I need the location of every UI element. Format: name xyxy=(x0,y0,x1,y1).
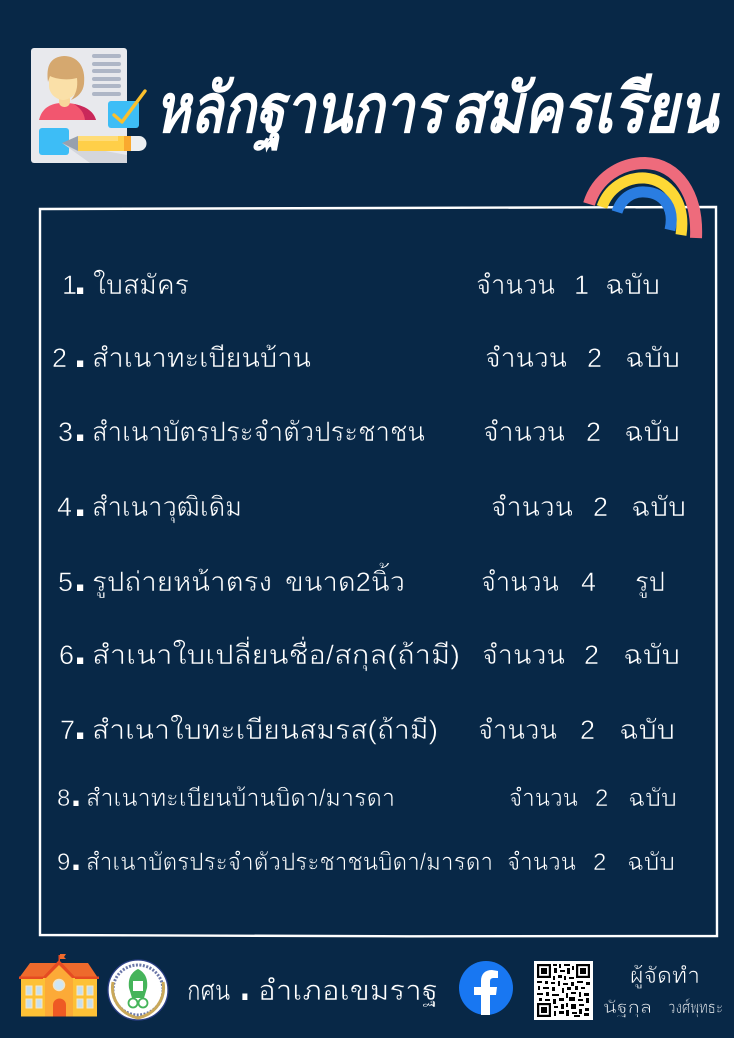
item 3: . xyxy=(74,402,86,451)
item 7: . xyxy=(74,700,86,749)
item 2: . xyxy=(74,328,86,377)
item 6: สำเนาใบเปลี่ยนชื่อ/สกุล(ถ้ามี) xyxy=(92,636,460,672)
icon: rainbow xyxy=(589,163,696,238)
item 8: 2 xyxy=(595,785,608,812)
item 5: 4 xyxy=(581,567,596,597)
organisation name: . xyxy=(240,961,250,1010)
credit name: นัฐกุล xyxy=(603,998,652,1018)
item 6: จำนวน xyxy=(482,640,565,670)
icon: institution seal xyxy=(108,960,168,1020)
item 8 xyxy=(57,773,677,814)
item 5: . xyxy=(74,552,86,601)
item 9: ฉบับ xyxy=(627,849,675,876)
item 6: . xyxy=(74,625,86,674)
credit xyxy=(603,963,723,1018)
icon: facebook xyxy=(459,961,513,1015)
item 1: . xyxy=(74,255,86,304)
item 2: จำนวน xyxy=(485,343,567,373)
item 2: สำเนาทะเบียนบ้าน xyxy=(92,343,311,373)
item 3 xyxy=(58,402,680,451)
item 9: . xyxy=(71,837,81,878)
title xyxy=(155,71,720,153)
item 9: 2 xyxy=(593,849,606,876)
item 7: สำเนาใบทะเบียนสมรส(ถ้ามี) xyxy=(92,714,438,745)
item 5: รูป xyxy=(635,567,665,598)
item 3: 2 xyxy=(586,417,601,447)
organisation name: อำเภอเขมราฐ xyxy=(258,975,438,1007)
item 4: 4 xyxy=(57,492,72,522)
item 6 xyxy=(59,625,680,674)
item 3: จำนวน xyxy=(483,417,565,447)
item 6: 6 xyxy=(59,640,74,670)
organisation name: กศน xyxy=(187,975,241,1006)
icon: application form with pencil xyxy=(31,48,147,163)
item 1: 1 xyxy=(574,270,589,300)
item 1: ใบสมัคร xyxy=(93,269,189,300)
item 3: 3 xyxy=(58,417,73,447)
item 2: ฉบับ xyxy=(625,343,680,373)
title: หลักฐานการ xyxy=(155,71,450,153)
item 8: ฉบับ xyxy=(628,785,677,812)
credit heading: ผู้จัดทำ xyxy=(630,963,700,989)
item 2: 2 xyxy=(587,343,602,373)
item 7 xyxy=(60,700,675,749)
item 5: ขนาด2นิ้ว xyxy=(285,562,405,597)
item 2: 2 xyxy=(52,343,67,373)
item 9 xyxy=(57,837,675,878)
item 5: รูปถ่ายหน้าตรง xyxy=(92,567,272,598)
item 5: 5 xyxy=(58,567,73,597)
item 7: 7 xyxy=(60,715,75,745)
item 4: จำนวน xyxy=(491,492,573,522)
item 4: 2 xyxy=(593,492,608,522)
item 9: สำเนาบัตรประจำตัวประชาชนบิดา/มารดา xyxy=(86,849,493,876)
item 8: จำนวน xyxy=(509,785,578,812)
icon: school building xyxy=(19,954,99,1016)
item 8: 8 xyxy=(57,785,70,812)
item 6: ฉบับ xyxy=(623,640,680,670)
organisation name xyxy=(187,961,438,1010)
item 4: ฉบับ xyxy=(631,492,686,522)
item 1 xyxy=(62,255,660,304)
item 3: ฉบับ xyxy=(624,417,680,447)
item 8: . xyxy=(71,773,81,814)
item 3: สำเนาบัตรประจำตัวประชาชน xyxy=(92,417,425,447)
panel: document list frame xyxy=(40,207,717,936)
item 7: ฉบับ xyxy=(619,715,675,745)
item 2 xyxy=(52,328,680,377)
item 6: 2 xyxy=(584,640,599,670)
item 7: จำนวน xyxy=(478,715,557,745)
item 5: จำนวน xyxy=(481,567,559,597)
item 9: 9 xyxy=(57,849,70,876)
item 8: สำเนาทะเบียนบ้านบิดา/มารดา xyxy=(86,785,395,812)
item 1: จำนวน xyxy=(476,270,555,300)
item 7: 2 xyxy=(580,715,595,745)
item 4: . xyxy=(74,477,86,526)
item 4: สำเนาวุฒิเดิม xyxy=(92,492,242,524)
item 1: ฉบับ xyxy=(605,270,660,300)
item 4 xyxy=(57,477,686,526)
credit name xyxy=(603,998,723,1018)
document list xyxy=(52,255,686,878)
QR code xyxy=(534,961,593,1020)
item 1: 1 xyxy=(62,270,77,300)
item 9: จำนวน xyxy=(507,849,576,876)
item 5 xyxy=(58,552,665,601)
